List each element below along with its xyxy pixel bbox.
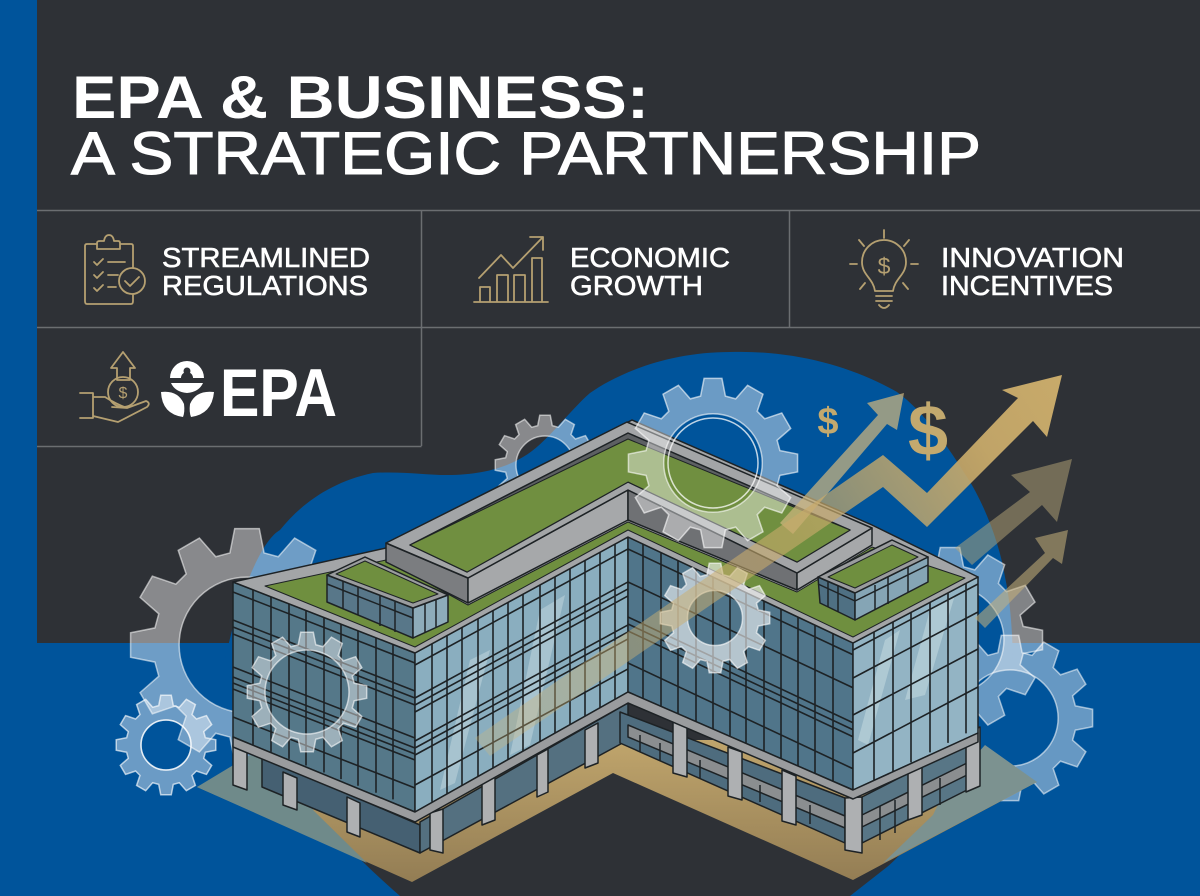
label: economic growth: [570, 242, 730, 301]
dollar sign large: $: [908, 391, 948, 471]
inner right facade: [628, 537, 853, 798]
label: streamlined regulations: STREAMLINED: [162, 242, 370, 273]
arrow: main zigzag growth arrow: [475, 375, 1062, 756]
label: streamlined regulations: REGULATIONS: [162, 270, 368, 301]
roof green strip: [265, 522, 965, 647]
feature: innovation incentives: [850, 230, 1124, 308]
title line 1: EPA & BUSINESS:: [72, 64, 649, 131]
gear: overlay on left facade: [247, 632, 367, 752]
logo: EPA emblem: [161, 361, 214, 417]
logo: EPA wordmark: EPA: [220, 355, 337, 431]
gear: overlay on central facade: [660, 563, 770, 673]
icon: light bulb with dollar: $: [878, 253, 891, 279]
roof deck parapet: [233, 420, 978, 653]
building: [233, 420, 980, 853]
label: streamlined regulations: [162, 242, 370, 301]
label: innovation incentives: [941, 242, 1124, 301]
icon: bar chart with rising arrow: [474, 237, 548, 302]
label: economic growth: ECONOMIC: [570, 242, 730, 273]
title line 2: A STRATEGIC PARTNERSHIP: [71, 120, 981, 187]
gear: upper right behind building: [857, 547, 1043, 733]
penthouse: right roof unit: [818, 540, 928, 620]
icon: clipboard checklist: [85, 235, 145, 304]
ground floor glazing: [262, 703, 967, 853]
columns: [233, 720, 980, 853]
gear: top centre inner ring: [668, 418, 758, 508]
icon: hand holding coin with up arrow: [80, 352, 149, 422]
arrow: small upper arrow: [780, 393, 904, 534]
feature: EPA mark: [80, 352, 337, 431]
icon: hand holding coin with up arrow: $: [119, 385, 128, 402]
feature grid lines: [37, 210, 1200, 446]
label: innovation incentives: INCENTIVES: [941, 270, 1113, 301]
icon: light bulb with dollar: [850, 230, 918, 308]
gear: large left behind building: [131, 529, 363, 761]
label: innovation incentives: INNOVATION: [941, 242, 1124, 273]
planter: long L-shaped roof box: [386, 422, 872, 603]
title: [71, 64, 981, 187]
gear: small grey top behind roof: [495, 415, 595, 515]
background: blue blob behind building: [225, 352, 1013, 660]
gear: large top centre: [628, 378, 798, 548]
ground plinth: [197, 740, 1037, 882]
penthouse: left roof unit: [327, 557, 448, 638]
background: dark wedge beneath plinth: [313, 700, 975, 896]
background: blue lower band: [0, 643, 1200, 896]
left facade: [233, 582, 415, 812]
dollar sign small: $: [817, 401, 839, 443]
right facade: [853, 577, 978, 793]
gear: left facade inner ring: [141, 720, 191, 770]
gear: small lower left: [116, 695, 216, 795]
inner left facade: [415, 537, 628, 812]
background: blue left strip: [0, 0, 37, 896]
arrow: dim lower right: [975, 530, 1068, 628]
feature: economic growth: [474, 237, 730, 302]
gear: lower right behind building: [927, 635, 1093, 801]
floor band: [233, 692, 978, 822]
feature: streamlined regulations: [85, 235, 370, 304]
arrow: dim upper right: [955, 459, 1072, 565]
label: economic growth: GROWTH: [570, 270, 703, 301]
